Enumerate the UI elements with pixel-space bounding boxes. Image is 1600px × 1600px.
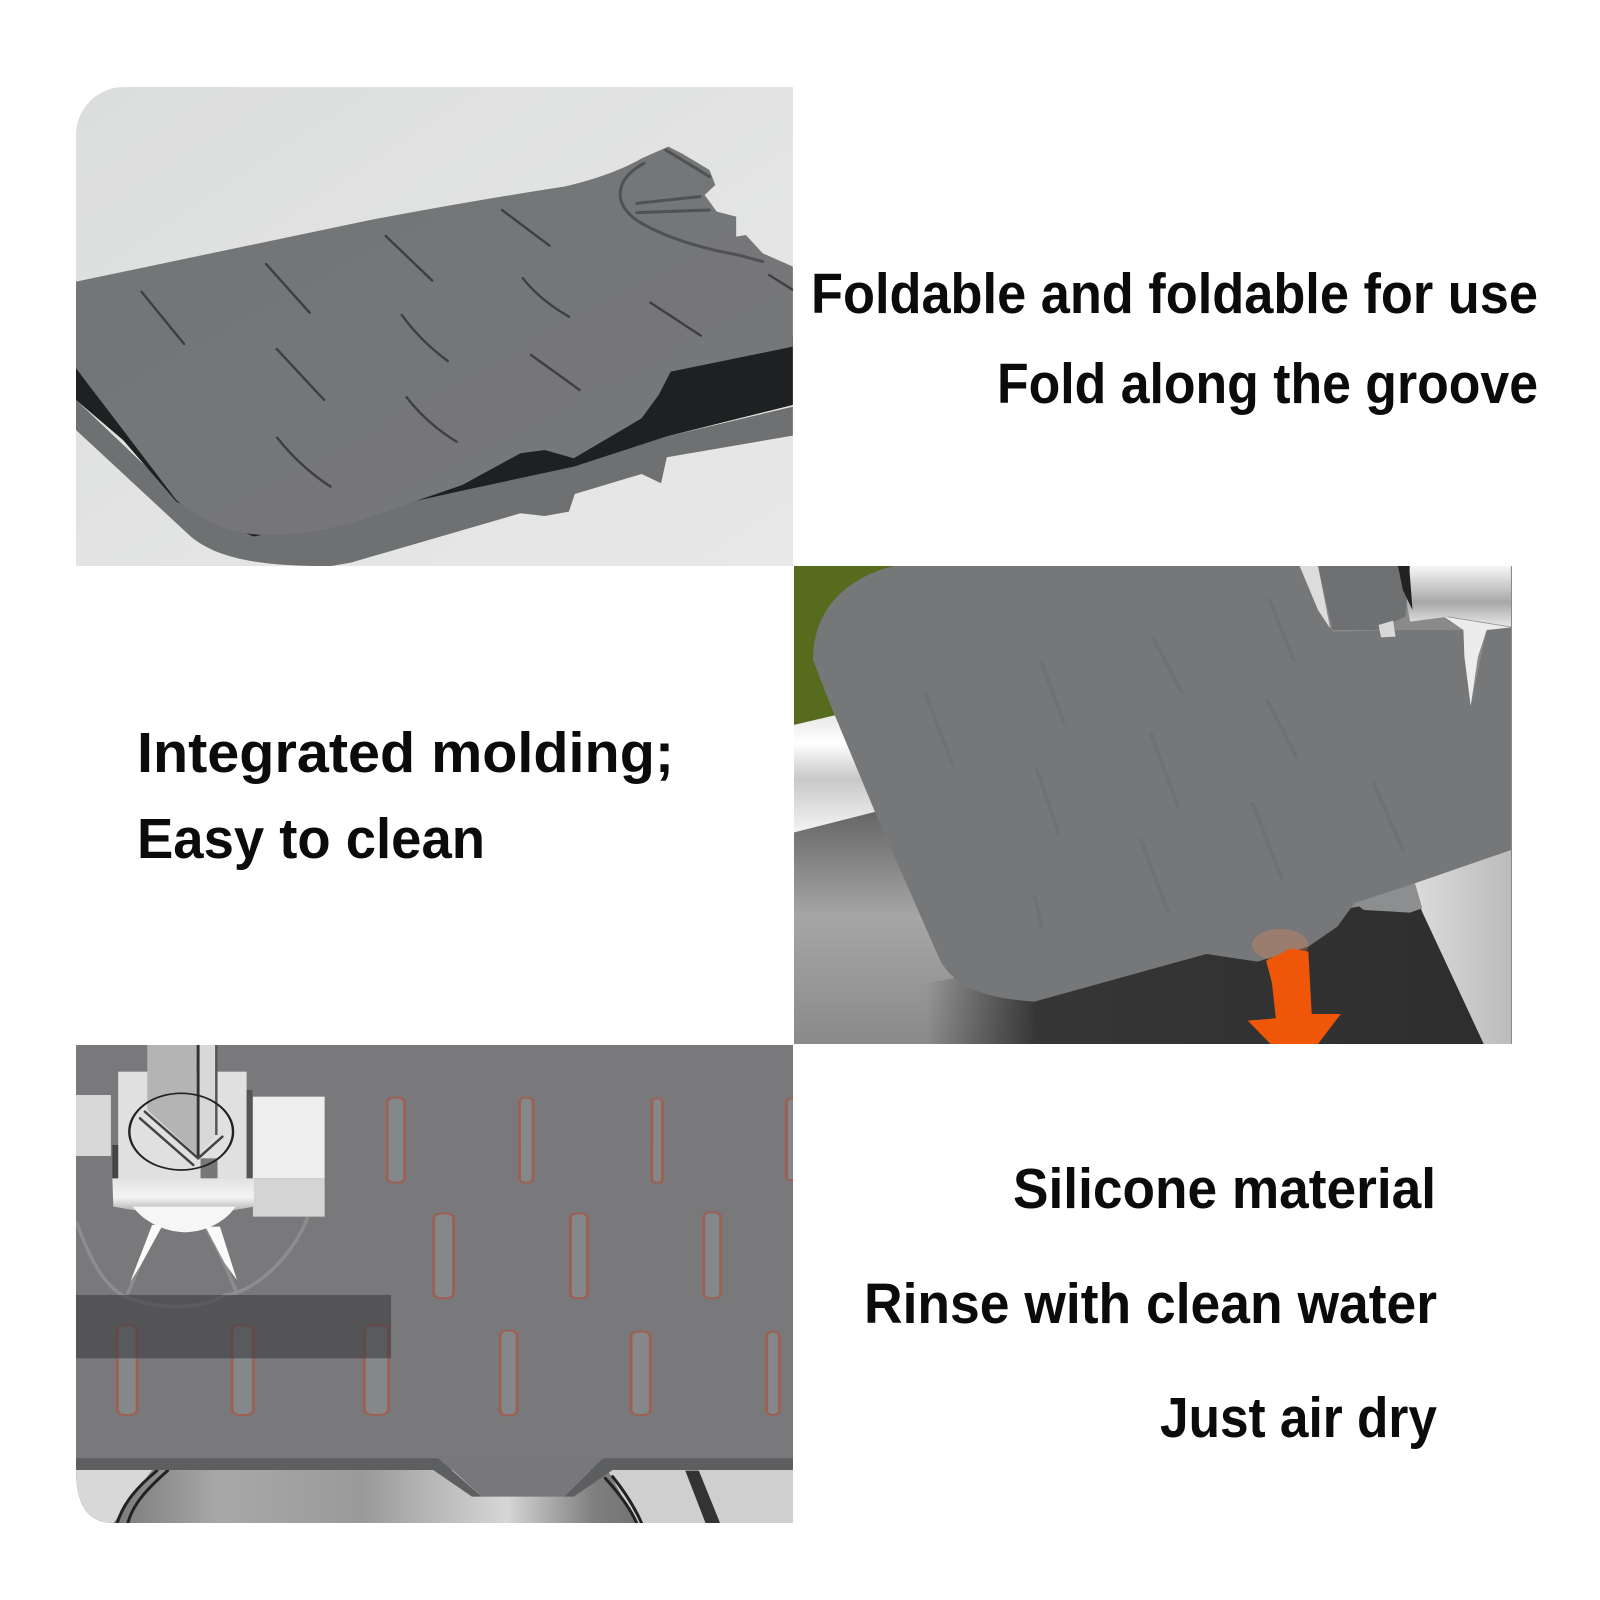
panel background: [76, 87, 793, 566]
folded silicone mat illustration: [76, 147, 793, 566]
faucet: [76, 1045, 325, 1282]
text line: Rinse with clean water: [864, 1272, 1437, 1336]
chrome faucet: [1400, 566, 1511, 627]
drainage slots: [141, 210, 793, 487]
mat edge: [76, 1458, 793, 1497]
dark gap between layers: [76, 337, 793, 537]
arrow glow: [1252, 929, 1308, 961]
upper mat layer: [76, 147, 793, 535]
right wall: [1413, 850, 1511, 1044]
panel: draining mat photo: [794, 566, 1512, 1044]
faucet cutout arcs: [77, 1218, 307, 1306]
text line: Fold along the groove: [997, 352, 1538, 416]
mat tab: [452, 1470, 590, 1497]
white rail: [794, 713, 882, 833]
text line: Just air dry: [1160, 1386, 1437, 1450]
faint slots: [925, 600, 1403, 927]
sink scene illustration: [794, 566, 1511, 1044]
dark band: [76, 1295, 391, 1358]
panel background: [794, 566, 1512, 1044]
orange arrow: [1248, 948, 1341, 1044]
lower mat layer: [76, 400, 793, 566]
panel: top view mat photo: [76, 1045, 798, 1523]
mat edge tab: [1354, 883, 1422, 913]
mat: [813, 566, 1511, 1002]
text line: Silicone material: [1013, 1157, 1436, 1221]
white faucet spike: [1444, 617, 1511, 706]
heading: foldable: [811, 262, 1538, 416]
green backdrop: [794, 566, 894, 725]
text line: Integrated molding;: [137, 721, 674, 785]
dark basin: [925, 897, 1484, 1044]
faucet cutout ridge: [620, 150, 763, 262]
top view illustration: [76, 1045, 798, 1523]
heading: silicone material: [864, 1157, 1437, 1450]
faucet block: [1318, 566, 1410, 630]
steel sink: [794, 812, 965, 1008]
panel background: [76, 1045, 793, 1523]
text line: Easy to clean: [137, 807, 485, 871]
heading: integrated molding: [137, 721, 674, 871]
text line: Foldable and foldable for use: [811, 262, 1538, 326]
sink below mat: [76, 1470, 793, 1523]
drainage slots: [117, 1098, 798, 1415]
panel: folded mat photo: [76, 87, 793, 566]
